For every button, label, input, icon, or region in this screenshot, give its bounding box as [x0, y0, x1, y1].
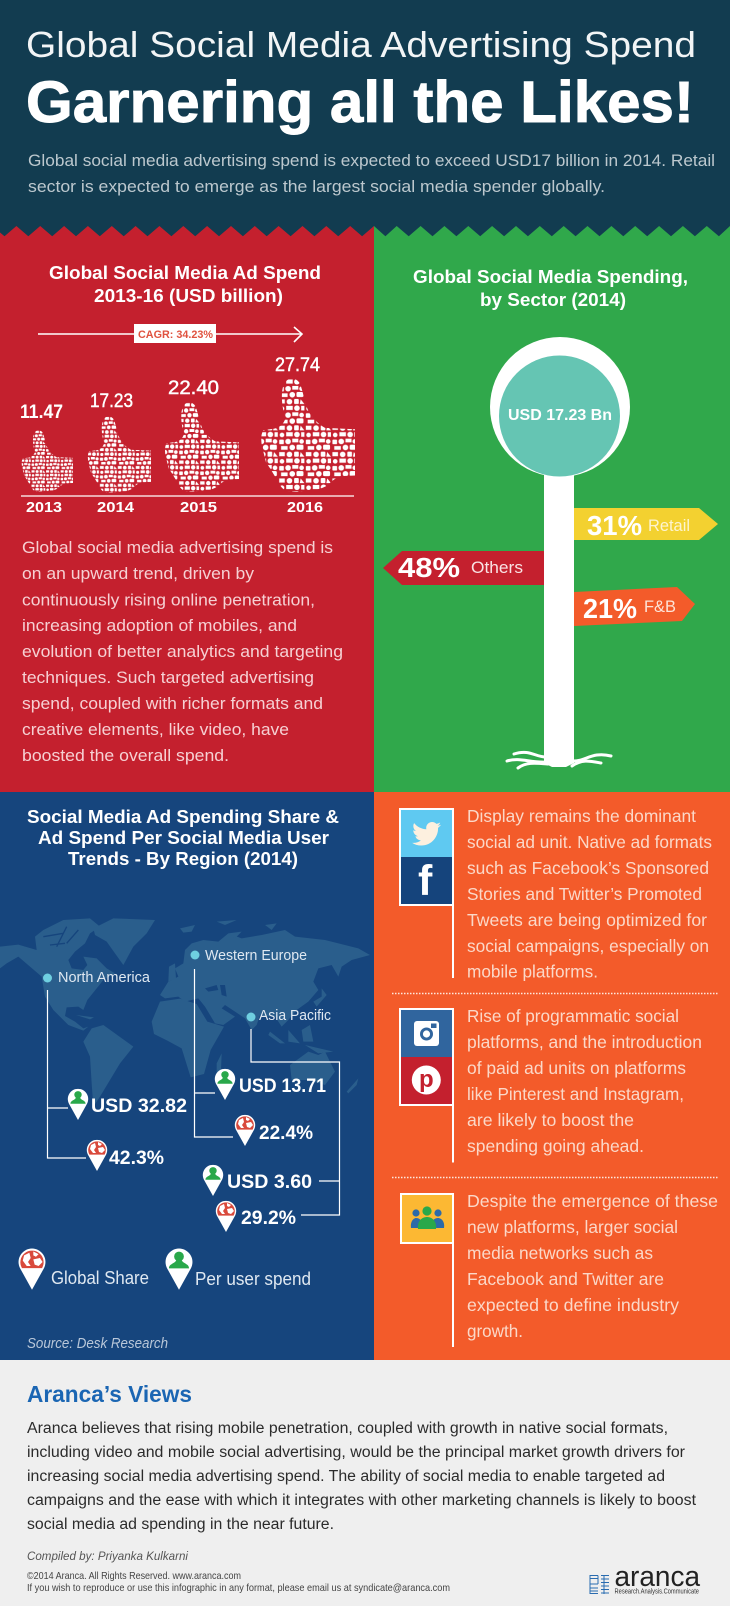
panel heading: by region: Ad Spend Per Social Media User: [38, 828, 329, 848]
logo: aranca: aranca: [614, 1561, 701, 1593]
text: display: Display remains the dominant: [467, 806, 696, 826]
icons: instagram and pinterest: p: [419, 1066, 434, 1093]
text: programmatic: are likely to boost the: [467, 1110, 634, 1130]
signpost pole: [490, 337, 630, 768]
region: Western Europe: Western Europe: [205, 947, 307, 964]
panel heading: by sector: Global Social Media Spending,: [413, 267, 688, 287]
text: views body: including video and mobile social advertising, would be the principal market growth drivers for: [27, 1444, 685, 1461]
panel heading: ad spend: [49, 263, 321, 306]
text: display: social ad unit. Native ad formats: [467, 832, 712, 852]
text: larger networks: Despite the emergence of these: [467, 1191, 718, 1211]
icons: instagram and pinterest: [399, 1008, 454, 1162]
text: larger networks: expected to define industry: [467, 1295, 679, 1315]
title: Global Social Media Advertising Spend: [26, 24, 696, 65]
panel: global ad spend (red): [0, 222, 374, 792]
legend: Per user spend: [195, 1269, 311, 1289]
total spend circle: USD 17.23 Bn: [508, 407, 612, 424]
region: Western Europe: USD 13.71: [239, 1076, 326, 1097]
region: North America: North America: [58, 969, 151, 986]
block: larger networks: [400, 1191, 718, 1347]
intro text: sector is expected to emerge as the largest social media spender globally.: [28, 178, 605, 196]
text: programmatic: Rise of programmatic social: [467, 1006, 679, 1026]
text block: ad spend commentary: [22, 538, 343, 765]
text block: ad spend commentary: on an upward trend, driven by: [22, 564, 255, 583]
thumb 2014: 2014: [97, 499, 135, 516]
text: views body: [27, 1420, 697, 1533]
text block: ad spend commentary: increasing adoption of mobiles, and: [22, 616, 297, 635]
total spend circle: [499, 356, 620, 476]
region: North America: 42.3%: [109, 1148, 164, 1169]
panel heading: ad spend: 2013-16 (USD billion): [94, 286, 283, 306]
title: [26, 24, 696, 135]
copyright: [27, 1570, 450, 1594]
block: programmatic platforms: [399, 1006, 702, 1162]
thumb 2013: 2013: [26, 499, 62, 516]
text: programmatic: spending going ahead.: [467, 1136, 644, 1156]
arrow: others 48%: Others: [471, 558, 523, 577]
region: Asia Pacific: 29.2%: [241, 1208, 296, 1229]
text block: ad spend commentary: boosted the overall spend.: [22, 746, 229, 765]
arrow: retail 31%: [574, 508, 718, 541]
arrow: F&B 21%: [574, 587, 695, 626]
icons: twitter and facebook: [399, 808, 454, 978]
thumb 2015: [165, 378, 239, 516]
intro text: [28, 152, 715, 196]
arrow: F&B 21%: 21%: [583, 593, 637, 624]
text: display: social campaigns, especially on: [467, 936, 709, 956]
panel heading: by sector: by Sector (2014): [480, 290, 626, 310]
copyright: If you wish to reproduce or use this infographic in any format, please email us at syndicate@aranca.com: [27, 1582, 450, 1594]
region: Asia Pacific: [203, 1007, 340, 1232]
text block: ad spend commentary: spend, coupled with richer formats and: [22, 694, 323, 713]
text: larger networks: new platforms, larger social: [467, 1217, 678, 1237]
text: display: such as Facebook’s Sponsored: [467, 858, 709, 878]
arrow: others 48%: [383, 551, 544, 585]
text: programmatic: platforms, and the introduction: [467, 1032, 702, 1052]
thumb 2016: 27.74: [275, 355, 320, 376]
text: display: Stories and Twitter’s Promoted: [467, 884, 702, 904]
credit: Compiled by: Priyanka Kulkarni: [27, 1549, 188, 1563]
source note: Source: Desk Research: [27, 1335, 168, 1352]
panel: Aranca's views: [0, 1360, 730, 1606]
icons: twitter and facebook: f: [418, 857, 433, 905]
thumb 2014: [88, 391, 151, 516]
roots: [507, 752, 611, 768]
text: larger networks: growth.: [467, 1321, 523, 1341]
arrow: F&B 21%: F&B: [644, 597, 676, 616]
text: views body: Aranca believes that rising mobile penetration, coupled with growth in native social formats,: [27, 1420, 668, 1437]
region: North America: USD 32.82: [91, 1096, 187, 1117]
logo: aranca: Research.Analysis.Communicate: [614, 1588, 699, 1596]
text: display: [467, 806, 712, 982]
arrow: retail 31%: 31%: [587, 510, 642, 541]
text: programmatic: of paid ad units on platforms: [467, 1058, 686, 1078]
thumb 2016: 2016: [287, 499, 323, 516]
text: programmatic: [467, 1006, 702, 1156]
text: views body: social media ad spending in the near future.: [27, 1516, 334, 1533]
arrow: others 48%: 48%: [398, 552, 460, 583]
region: Asia Pacific: USD 3.60: [227, 1172, 312, 1193]
CAGR arrow: [38, 324, 302, 343]
thumb 2015: 2015: [180, 499, 217, 516]
title: Garnering all the Likes!: [26, 70, 694, 135]
text: larger networks: media networks such as: [467, 1243, 653, 1263]
panel: social platforms (orange): [374, 792, 730, 1360]
text: views body: increasing social media advertising spend. The ability of social media to enable targeted ad: [27, 1468, 665, 1485]
panel: regional spending (blue): [0, 792, 374, 1360]
text: larger networks: Facebook and Twitter are: [467, 1269, 664, 1289]
region: Asia Pacific: Asia Pacific: [259, 1007, 331, 1024]
text: display: mobile platforms.: [467, 962, 598, 982]
region: Western Europe: [190, 947, 326, 1146]
legend: Global Share: [51, 1268, 149, 1288]
text: programmatic: like Pinterest and Instagram,: [467, 1084, 684, 1104]
CAGR arrow: CAGR: 34.23%: [138, 329, 213, 341]
text block: ad spend commentary: techniques. Such targeted advertising: [22, 668, 314, 687]
panel heading: by region: Trends - By Region (2014): [68, 849, 298, 869]
text block: ad spend commentary: creative elements, like video, have: [22, 720, 289, 739]
text block: ad spend commentary: evolution of better analytics and targeting: [22, 642, 343, 661]
text: larger networks: [467, 1191, 718, 1341]
region: Western Europe: 22.4%: [259, 1123, 313, 1144]
heading: Aranca's Views: Aranca’s Views: [27, 1381, 192, 1407]
thumb 2015: 22.40: [168, 378, 219, 399]
thumb 2013: [20, 402, 73, 516]
thumb 2016: [261, 355, 355, 516]
panel heading: by region: [27, 807, 339, 869]
legend: [19, 1249, 311, 1290]
copyright: ©2014 Aranca. All Rights Reserved. www.aranca.com: [27, 1570, 241, 1582]
block: display ad units: [399, 806, 712, 982]
header band: [0, 0, 730, 236]
thumb 2013: 11.47: [20, 402, 63, 423]
text: views body: campaigns and the ease with which it integrates with other marketing channels is likely to boost: [27, 1492, 697, 1509]
text block: ad spend commentary: Global social media advertising spend is: [22, 538, 333, 557]
intro text: Global social media advertising spend is expected to exceed USD17 billion in 2014. Retail: [28, 152, 715, 170]
world map: [0, 918, 370, 1107]
icon: people group: [400, 1193, 454, 1347]
panel heading: ad spend: Global Social Media Ad Spend: [49, 263, 321, 283]
panel: spending by sector (green): [374, 222, 730, 792]
panel heading: by region: Social Media Ad Spending Share &: [27, 807, 339, 827]
panel heading: by sector: [413, 267, 688, 310]
arrow: retail 31%: Retail: [648, 516, 690, 535]
thumb 2014: 17.23: [90, 391, 133, 412]
text: display: Tweets are being optimized for: [467, 910, 707, 930]
thumb chart 2013-2016: [20, 355, 355, 516]
region: North America: [43, 969, 187, 1171]
text block: ad spend commentary: continuously rising online penetration,: [22, 590, 315, 610]
